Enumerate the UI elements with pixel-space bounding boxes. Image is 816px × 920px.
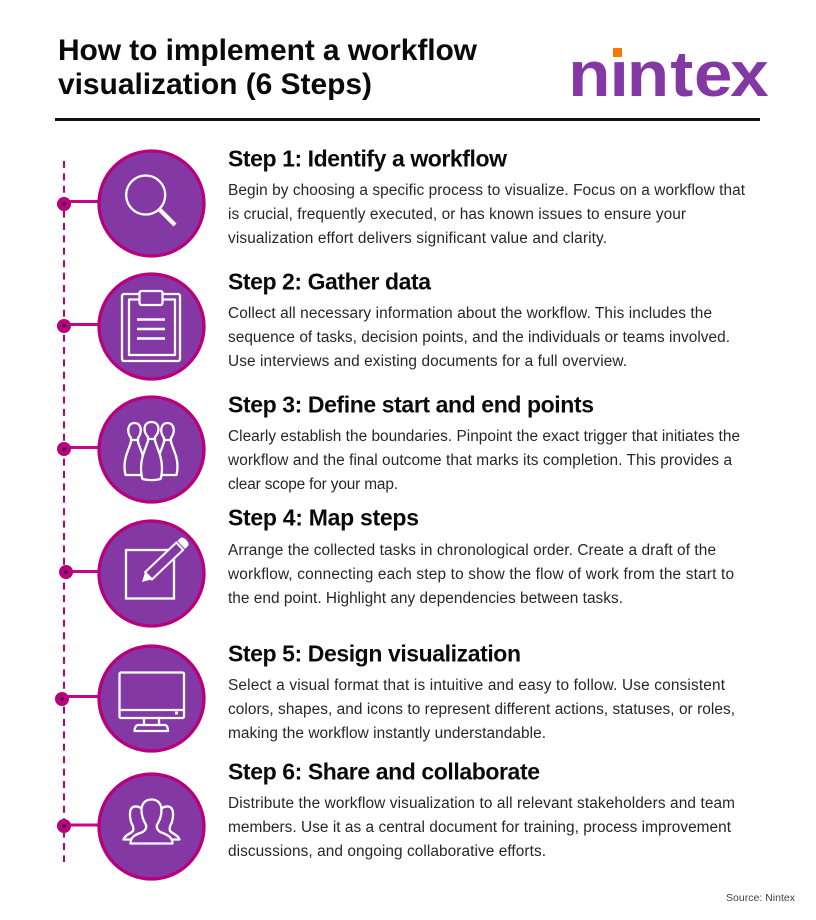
heading: step 2: Step 2: Gather data	[228, 268, 431, 294]
description: step 4: the end point. Highlight any dependencies between tasks.	[228, 590, 623, 607]
description: step 1	[228, 182, 746, 247]
description: step 3: workflow and the final outcome that marks its completion. This provides a	[227, 452, 732, 469]
timeline node 4	[59, 565, 99, 579]
description: step 2: Use interviews and existing documents for a full overview.	[228, 353, 627, 370]
description: step 2: sequence of tasks, decision points, and the individuals or teams involved.	[228, 329, 730, 346]
timeline node 2	[57, 319, 99, 333]
description: step 5	[228, 677, 735, 742]
description: step 6: members. Use it as a central document for training, process improvement	[228, 819, 732, 836]
description: step 2: Collect all necessary information about the workflow. This includes the	[228, 305, 712, 322]
description: step 4: Arrange the collected tasks in chronological order. Create a draft of the	[228, 542, 716, 559]
description: step 5: Select a visual format that is intuitive and easy to follow. Use consistent	[228, 677, 726, 694]
step 6	[57, 758, 735, 879]
description: step 6: discussions, and ongoing collaborative efforts.	[228, 843, 546, 860]
timeline dashed line	[63, 161, 65, 862]
title: visualization (6 Steps)	[58, 68, 372, 101]
heading: step 1: Step 1: Identify a workflow	[228, 146, 507, 172]
icon: clipboard	[99, 274, 204, 379]
description: step 4	[227, 542, 734, 607]
description: step 5: colors, shapes, and icons to represent different actions, statuses, or roles,	[228, 701, 735, 718]
description: step 3: Clearly establish the boundaries. Pinpoint the exact trigger that initiates the	[228, 428, 740, 445]
icon: group of people	[99, 774, 204, 879]
description: step 6	[228, 795, 735, 860]
description: step 2	[228, 305, 730, 370]
timeline node 3	[57, 442, 99, 456]
logo: nintex: nintex	[568, 39, 769, 110]
step 4	[59, 504, 734, 626]
step 3	[57, 392, 740, 502]
timeline node 6	[57, 819, 99, 833]
description: step 1: Begin by choosing a specific process to visualize. Focus on a workflow that	[228, 182, 746, 199]
description: step 3: clear scope for your map.	[228, 476, 398, 493]
description: step 6: Distribute the workflow visualization to all relevant stakeholders and team	[228, 795, 735, 812]
timeline node 5	[55, 692, 99, 706]
step 5	[55, 640, 735, 751]
title: How to implement a workflow	[58, 34, 478, 67]
description: step 4: workflow, connecting each step to show the flow of work from the start to	[227, 566, 734, 583]
description: step 3	[227, 428, 740, 493]
source note: Source: Nintex	[726, 892, 796, 904]
step 1	[57, 146, 746, 256]
heading: step 6: Step 6: Share and collaborate	[228, 758, 540, 784]
heading: step 4: Step 4: Map steps	[228, 504, 419, 530]
icon: monitor	[99, 646, 204, 751]
heading: step 3: Step 3: Define start and end points	[228, 392, 594, 418]
icon: magnifying glass	[99, 151, 204, 256]
timeline node 1	[57, 197, 99, 211]
icon: edit pencil	[99, 521, 204, 626]
heading: step 5: Step 5: Design visualization	[228, 640, 521, 666]
description: step 5: making the workflow instantly understandable.	[228, 725, 546, 742]
description: step 1: is crucial, frequently executed, or has known issues to ensure your	[228, 206, 686, 223]
icon: bowling pins	[99, 397, 204, 502]
title	[58, 34, 478, 101]
step 2	[57, 268, 730, 379]
description: step 1: visualization effort delivers significant value and clarity.	[228, 230, 607, 247]
